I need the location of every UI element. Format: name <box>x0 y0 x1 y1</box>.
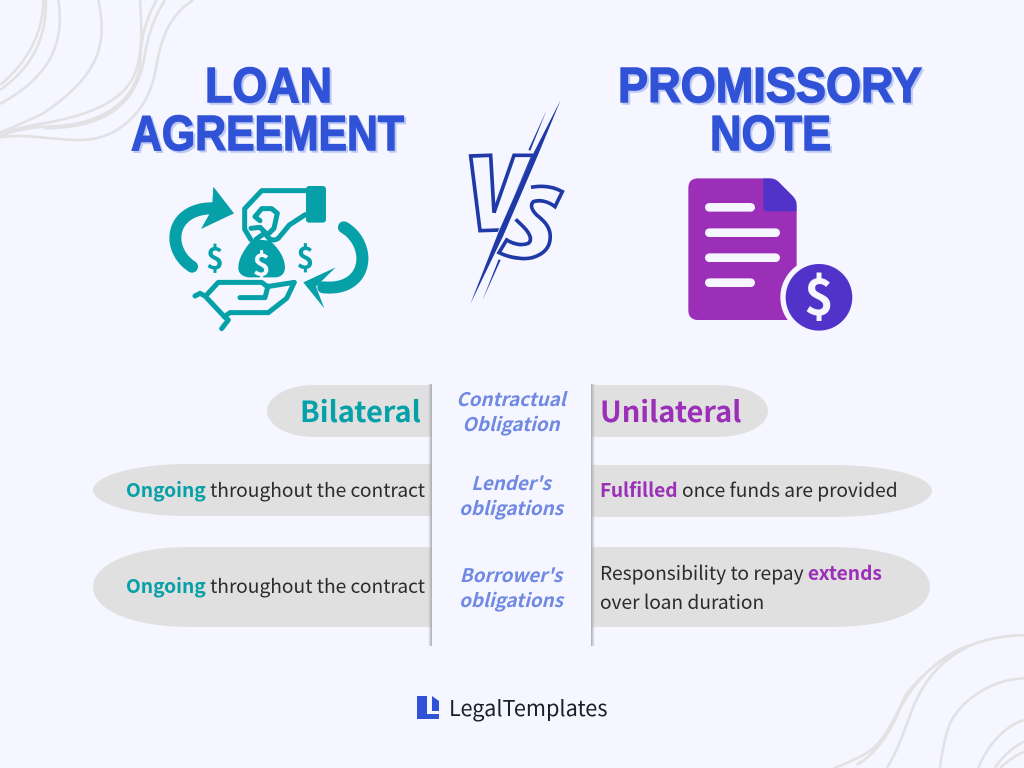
icon: loan money exchange <box>175 186 362 329</box>
text: Bilateral: Bilateral <box>300 389 421 431</box>
icon: VS emblem <box>470 100 562 304</box>
label: Contractual Obligation: Contractual <box>456 385 568 412</box>
icon: loan money exchange: $ <box>253 240 271 284</box>
label: Borrower's obligations: obligations <box>459 586 565 613</box>
text: left row 3: Ongoing throughout the contract <box>126 571 425 599</box>
icon: promissory note document with dollar: $ <box>804 258 834 330</box>
text: left row 2: Ongoing throughout the contract <box>126 475 425 503</box>
title: Promissory Note <box>618 59 922 161</box>
text: right row 3 <box>600 558 882 615</box>
label: Borrower's obligations <box>459 561 565 613</box>
text: right row 3: over loan duration <box>600 587 764 615</box>
icon: loan money exchange: $ <box>296 233 314 277</box>
icon: promissory note document with dollar <box>688 178 858 336</box>
label: Contractual Obligation: Obligation <box>462 410 561 437</box>
logo: LegalTemplates: LegalTemplates <box>449 692 607 723</box>
label: Lender's obligations: Lender's <box>471 469 553 496</box>
title: Loan Agreement: LOAN <box>205 59 332 113</box>
title: Loan Agreement <box>131 59 404 161</box>
title: Loan Agreement: AGREEMENT <box>131 107 404 161</box>
text: right row 3: Responsibility to repay extends <box>600 558 882 586</box>
text: right row 2: Fulfilled once funds are provided <box>600 475 898 503</box>
label: Borrower's obligations: Borrower's <box>460 561 564 588</box>
panel: right comparison pills <box>591 385 932 627</box>
text: Unilateral: Unilateral <box>600 389 741 431</box>
title: Promissory Note: PROMISSORY <box>618 59 922 113</box>
title: Promissory Note: NOTE <box>710 107 831 161</box>
label: Contractual Obligation <box>456 385 568 437</box>
icon: loan money exchange: $ <box>206 234 224 278</box>
label: Lender's obligations <box>459 469 565 521</box>
label: Lender's obligations: obligations <box>459 494 565 521</box>
panel: left comparison pills <box>93 385 432 627</box>
